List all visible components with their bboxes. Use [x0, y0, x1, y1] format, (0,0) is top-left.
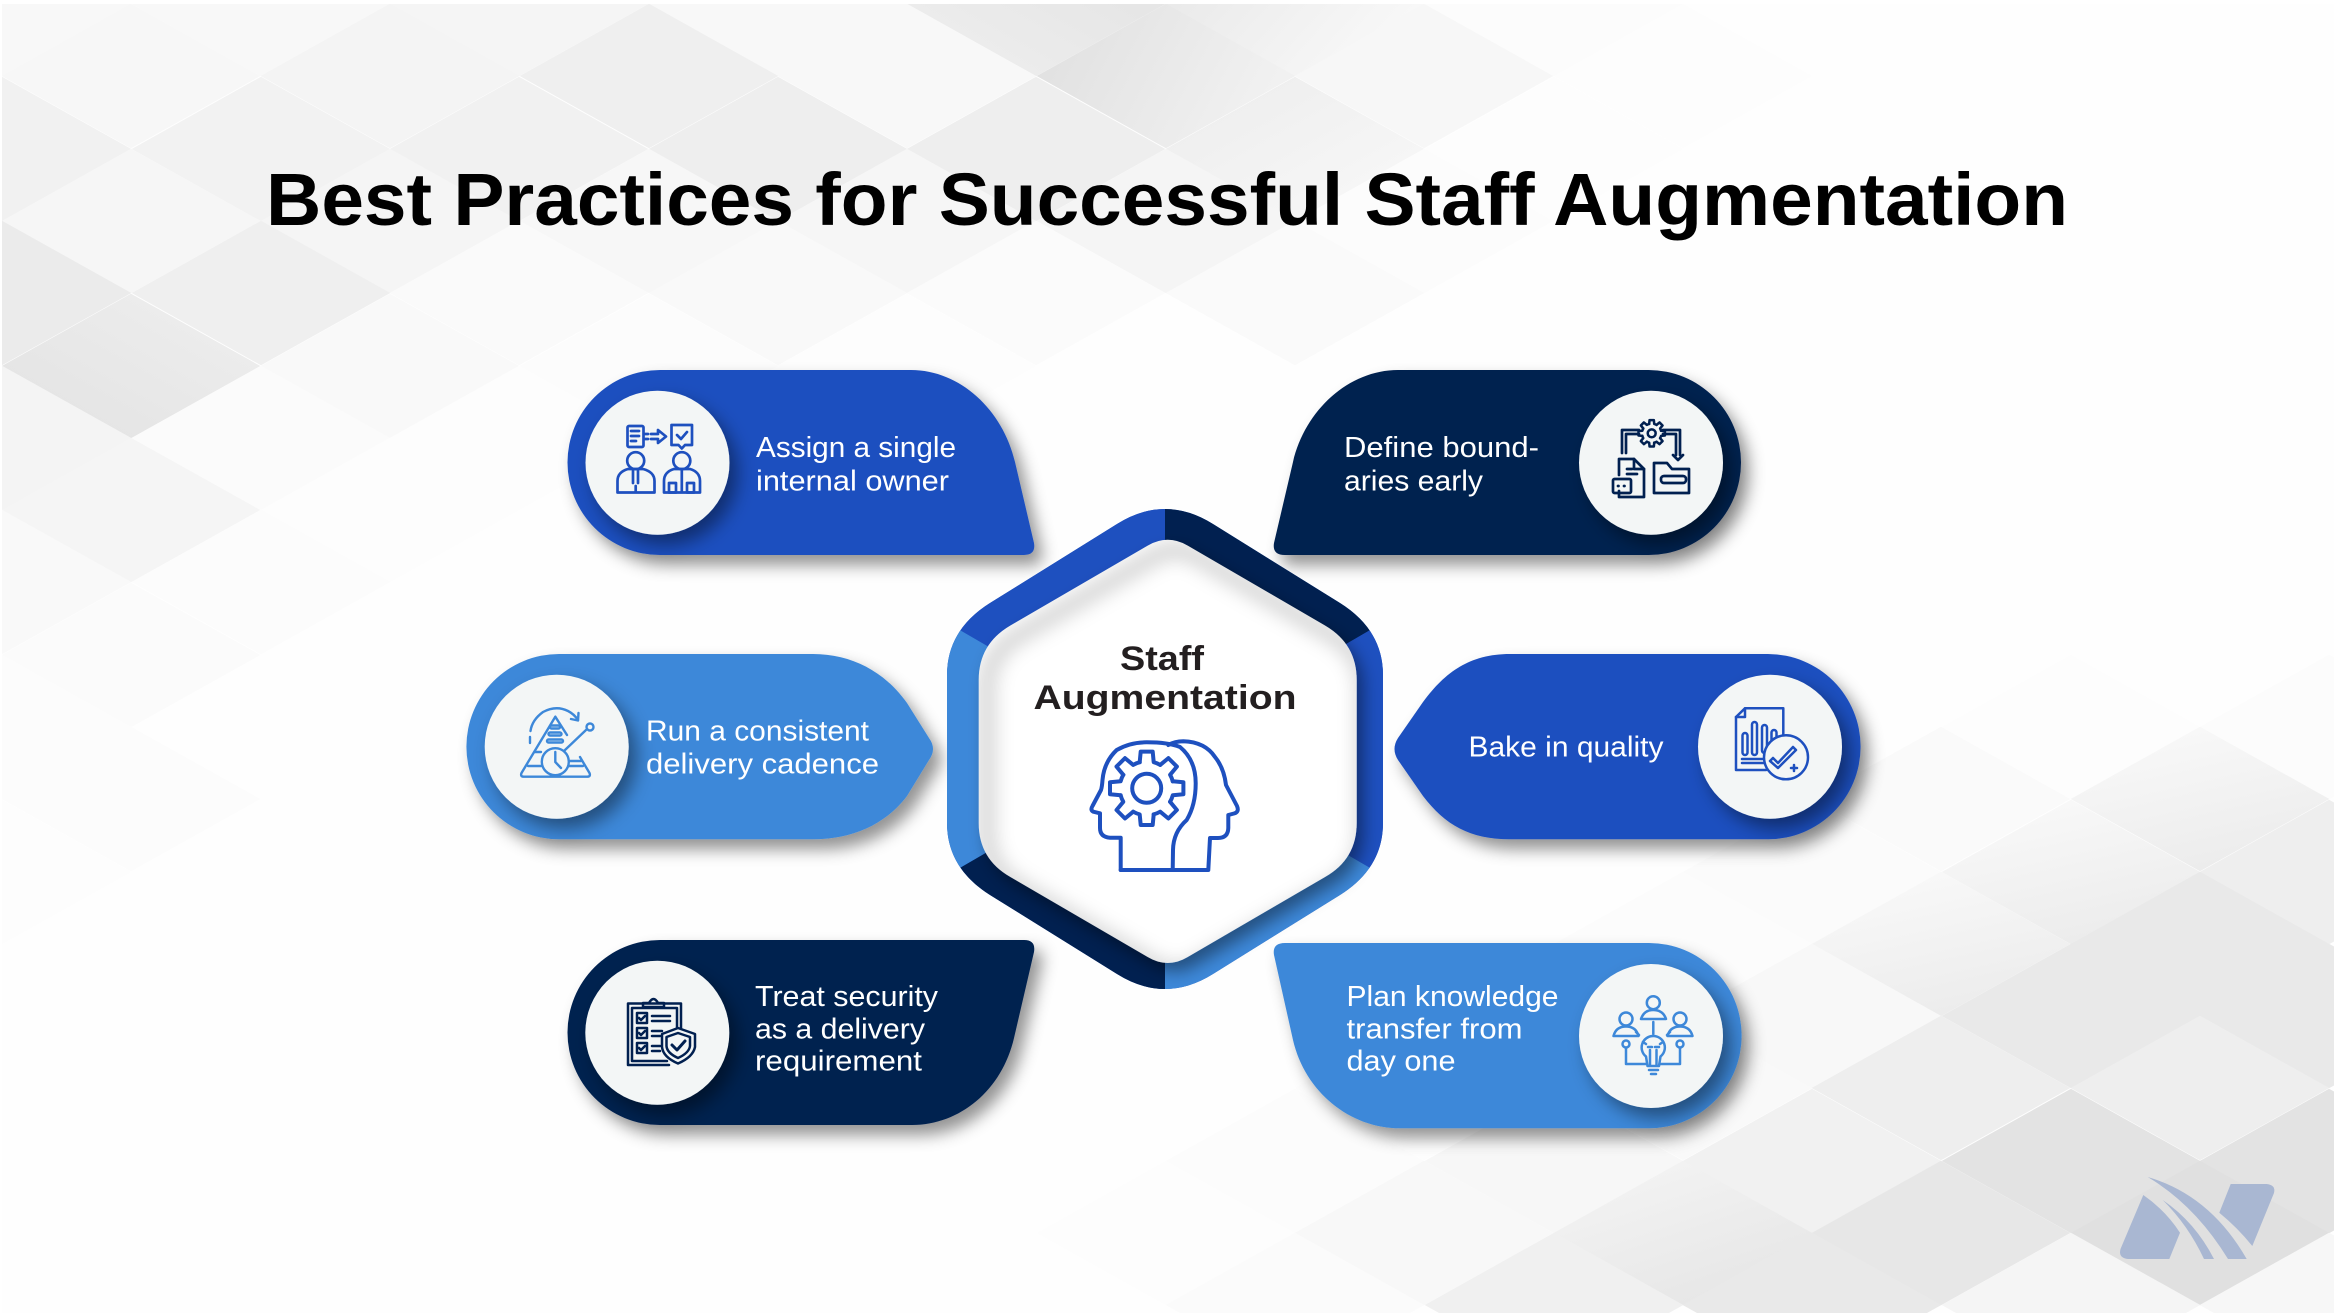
- icon: checklist with shield: [628, 999, 695, 1065]
- title: Best Practices for Successful Staff Augmentation: [266, 158, 2068, 241]
- label: [756, 432, 956, 498]
- hexagon inner panel: [979, 540, 1365, 973]
- panel: bake in quality: [1394, 654, 1861, 839]
- label: [1344, 432, 1539, 498]
- center heading: Staff: [1120, 640, 1205, 678]
- panel: plan knowledge transfer from day one: [1274, 943, 1742, 1128]
- label: Plan knowledge: [1346, 981, 1558, 1013]
- label: Assign a single: [756, 432, 956, 464]
- label: Bake in quality: [1468, 732, 1664, 764]
- icon: handover between two people: [618, 425, 700, 492]
- label: as a delivery: [755, 1013, 926, 1045]
- label: transfer from: [1346, 1013, 1522, 1045]
- icon: team around a lightbulb: [1614, 996, 1692, 1074]
- label: internal owner: [756, 466, 949, 498]
- label: requirement: [755, 1046, 922, 1078]
- panel: treat security as a delivery requirement: [568, 940, 1034, 1125]
- label: Define bound-: [1344, 432, 1539, 464]
- center heading: Augmentation: [1034, 679, 1296, 717]
- label: Run a consistent: [646, 716, 869, 748]
- center heading: [1034, 640, 1296, 717]
- label: aries early: [1344, 466, 1484, 498]
- label: [755, 981, 939, 1078]
- logo mark: [2120, 1177, 2274, 1259]
- panel: assign a single internal owner: [568, 370, 1034, 555]
- label: [1346, 981, 1558, 1078]
- panel: run a consistent delivery cadence: [466, 654, 933, 839]
- hexagon ring: [947, 509, 1383, 989]
- label: delivery cadence: [646, 748, 879, 780]
- icon: gear flow between document and folder: [1613, 420, 1689, 497]
- label: Treat security: [755, 981, 939, 1013]
- label: day one: [1346, 1046, 1456, 1078]
- label: [646, 716, 879, 780]
- central hexagon: [947, 509, 1383, 989]
- panel: define boundaries early: [1274, 370, 1741, 555]
- icon: two heads with gear: [1091, 741, 1238, 870]
- icon: pyramid with clock: [521, 708, 594, 777]
- icon: report with check mark: [1736, 708, 1808, 779]
